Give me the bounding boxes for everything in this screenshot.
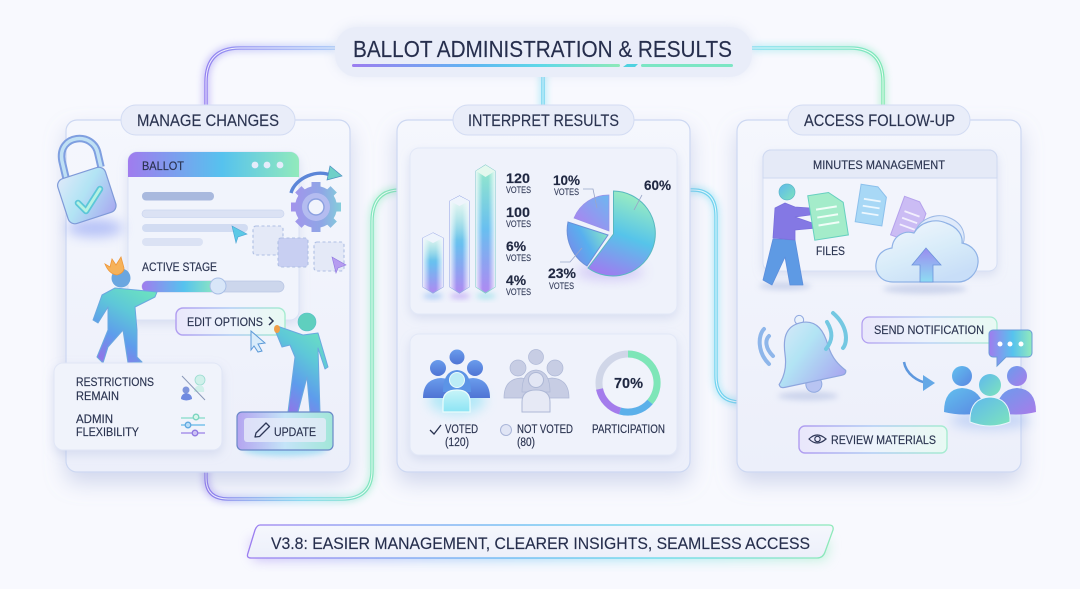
person with crown [93, 257, 157, 363]
card: minutes management: MINUTES MANAGEMENT [813, 160, 945, 172]
button: edit options [176, 308, 285, 335]
bar labels: VOTES [506, 219, 531, 229]
bar labels: 100 [506, 205, 530, 220]
icon: chat bubble [989, 330, 1032, 366]
button: update [237, 412, 333, 456]
connector: manage changes to interpret results [206, 190, 400, 499]
pie labels: VOTES [554, 187, 579, 197]
button: send notification: SEND NOTIFICATION [874, 325, 984, 337]
legend labels [430, 424, 665, 449]
legend labels: (120) [445, 437, 469, 449]
button: send notification [862, 317, 997, 343]
icon: gear with arrow [291, 166, 342, 232]
icon: purple document [891, 196, 929, 244]
legend labels: VOTED [445, 424, 478, 436]
icon: not voted group [504, 350, 569, 412]
bar labels: 6% [506, 239, 526, 254]
icon: cloud upload [876, 216, 978, 294]
icon: restricted users [181, 375, 205, 400]
card: restrictions and flexibility: REMAIN [76, 391, 119, 403]
person pointing [274, 313, 328, 412]
heading: access follow-up: ACCESS FOLLOW-UP [804, 112, 955, 130]
connector: title to access follow-up [752, 48, 883, 122]
bar labels: VOTES [506, 253, 531, 263]
icon: sliders [181, 414, 205, 436]
pie labels: VOTES [549, 281, 574, 291]
pie labels [548, 173, 671, 291]
pie labels: 60% [644, 178, 671, 193]
bar labels [506, 171, 531, 297]
card: restrictions and flexibility: FLEXIBILITY [76, 427, 139, 439]
ballot window [128, 152, 299, 320]
panel: manage changes [54, 105, 350, 472]
cursor: purple [332, 257, 346, 273]
icon: green document [808, 190, 848, 240]
connector: title to interpret results [540, 72, 546, 110]
legend labels: NOT VOTED [517, 424, 573, 436]
pie chart [560, 189, 655, 280]
card: minutes management [763, 150, 997, 271]
card: minutes management: FILES [816, 246, 845, 258]
button: update: UPDATE [274, 427, 316, 439]
button: review materials [799, 426, 947, 453]
pie labels: 23% [548, 266, 576, 281]
title: BALLOT ADMINISTRATION & RESULTS [353, 36, 732, 62]
title [335, 27, 752, 77]
icon: bell [760, 308, 849, 400]
footer banner: V3.8: EASIER MANAGEMENT, CLEARER INSIGHTS, SEAMLESS ACCESS [271, 534, 810, 553]
panel: access follow-up [737, 105, 1036, 472]
footer banner [247, 525, 833, 560]
legend labels: (80) [517, 437, 535, 449]
card: vote charts [410, 148, 677, 314]
legend labels: PARTICIPATION [592, 424, 665, 436]
heading: access follow-up [788, 105, 970, 135]
cursor: teal [232, 226, 247, 243]
card: restrictions and flexibility: RESTRICTIONS [76, 377, 154, 389]
icon: recipients group [944, 366, 1036, 429]
icon: blue document [855, 184, 888, 226]
panel: interpret results [397, 105, 690, 472]
donut chart: 70%: 70% [614, 376, 643, 392]
button: edit options: EDIT OPTIONS [187, 317, 263, 329]
card: restrictions and flexibility [54, 363, 222, 450]
heading: manage changes: MANAGE CHANGES [137, 112, 279, 130]
bar labels: 4% [506, 273, 526, 288]
icon: padlock [56, 139, 123, 237]
connector: title to manage changes [206, 48, 335, 110]
heading: interpret results [453, 105, 634, 135]
button: review materials: REVIEW MATERIALS [831, 435, 936, 447]
bar labels: 120 [506, 171, 530, 186]
connector: interpret results to access follow-up [688, 190, 740, 402]
donut chart: 70% [599, 354, 657, 412]
ballot window: ACTIVE STAGE [142, 262, 217, 274]
icon: voted group [423, 350, 490, 414]
cursor: pointer [251, 331, 265, 352]
heading: interpret results: INTERPRET RESULTS [468, 112, 619, 130]
bar chart [423, 165, 496, 299]
bar labels: VOTES [506, 287, 531, 297]
person carrying files [759, 184, 818, 290]
ballot window: BALLOT [142, 161, 184, 173]
heading: manage changes [121, 105, 295, 135]
arrow to group [904, 362, 935, 391]
card: participation [410, 334, 677, 455]
pie labels: 10% [553, 173, 580, 188]
bar labels: VOTES [506, 185, 531, 195]
card: restrictions and flexibility: ADMIN [76, 414, 113, 426]
drag tiles [253, 226, 344, 271]
